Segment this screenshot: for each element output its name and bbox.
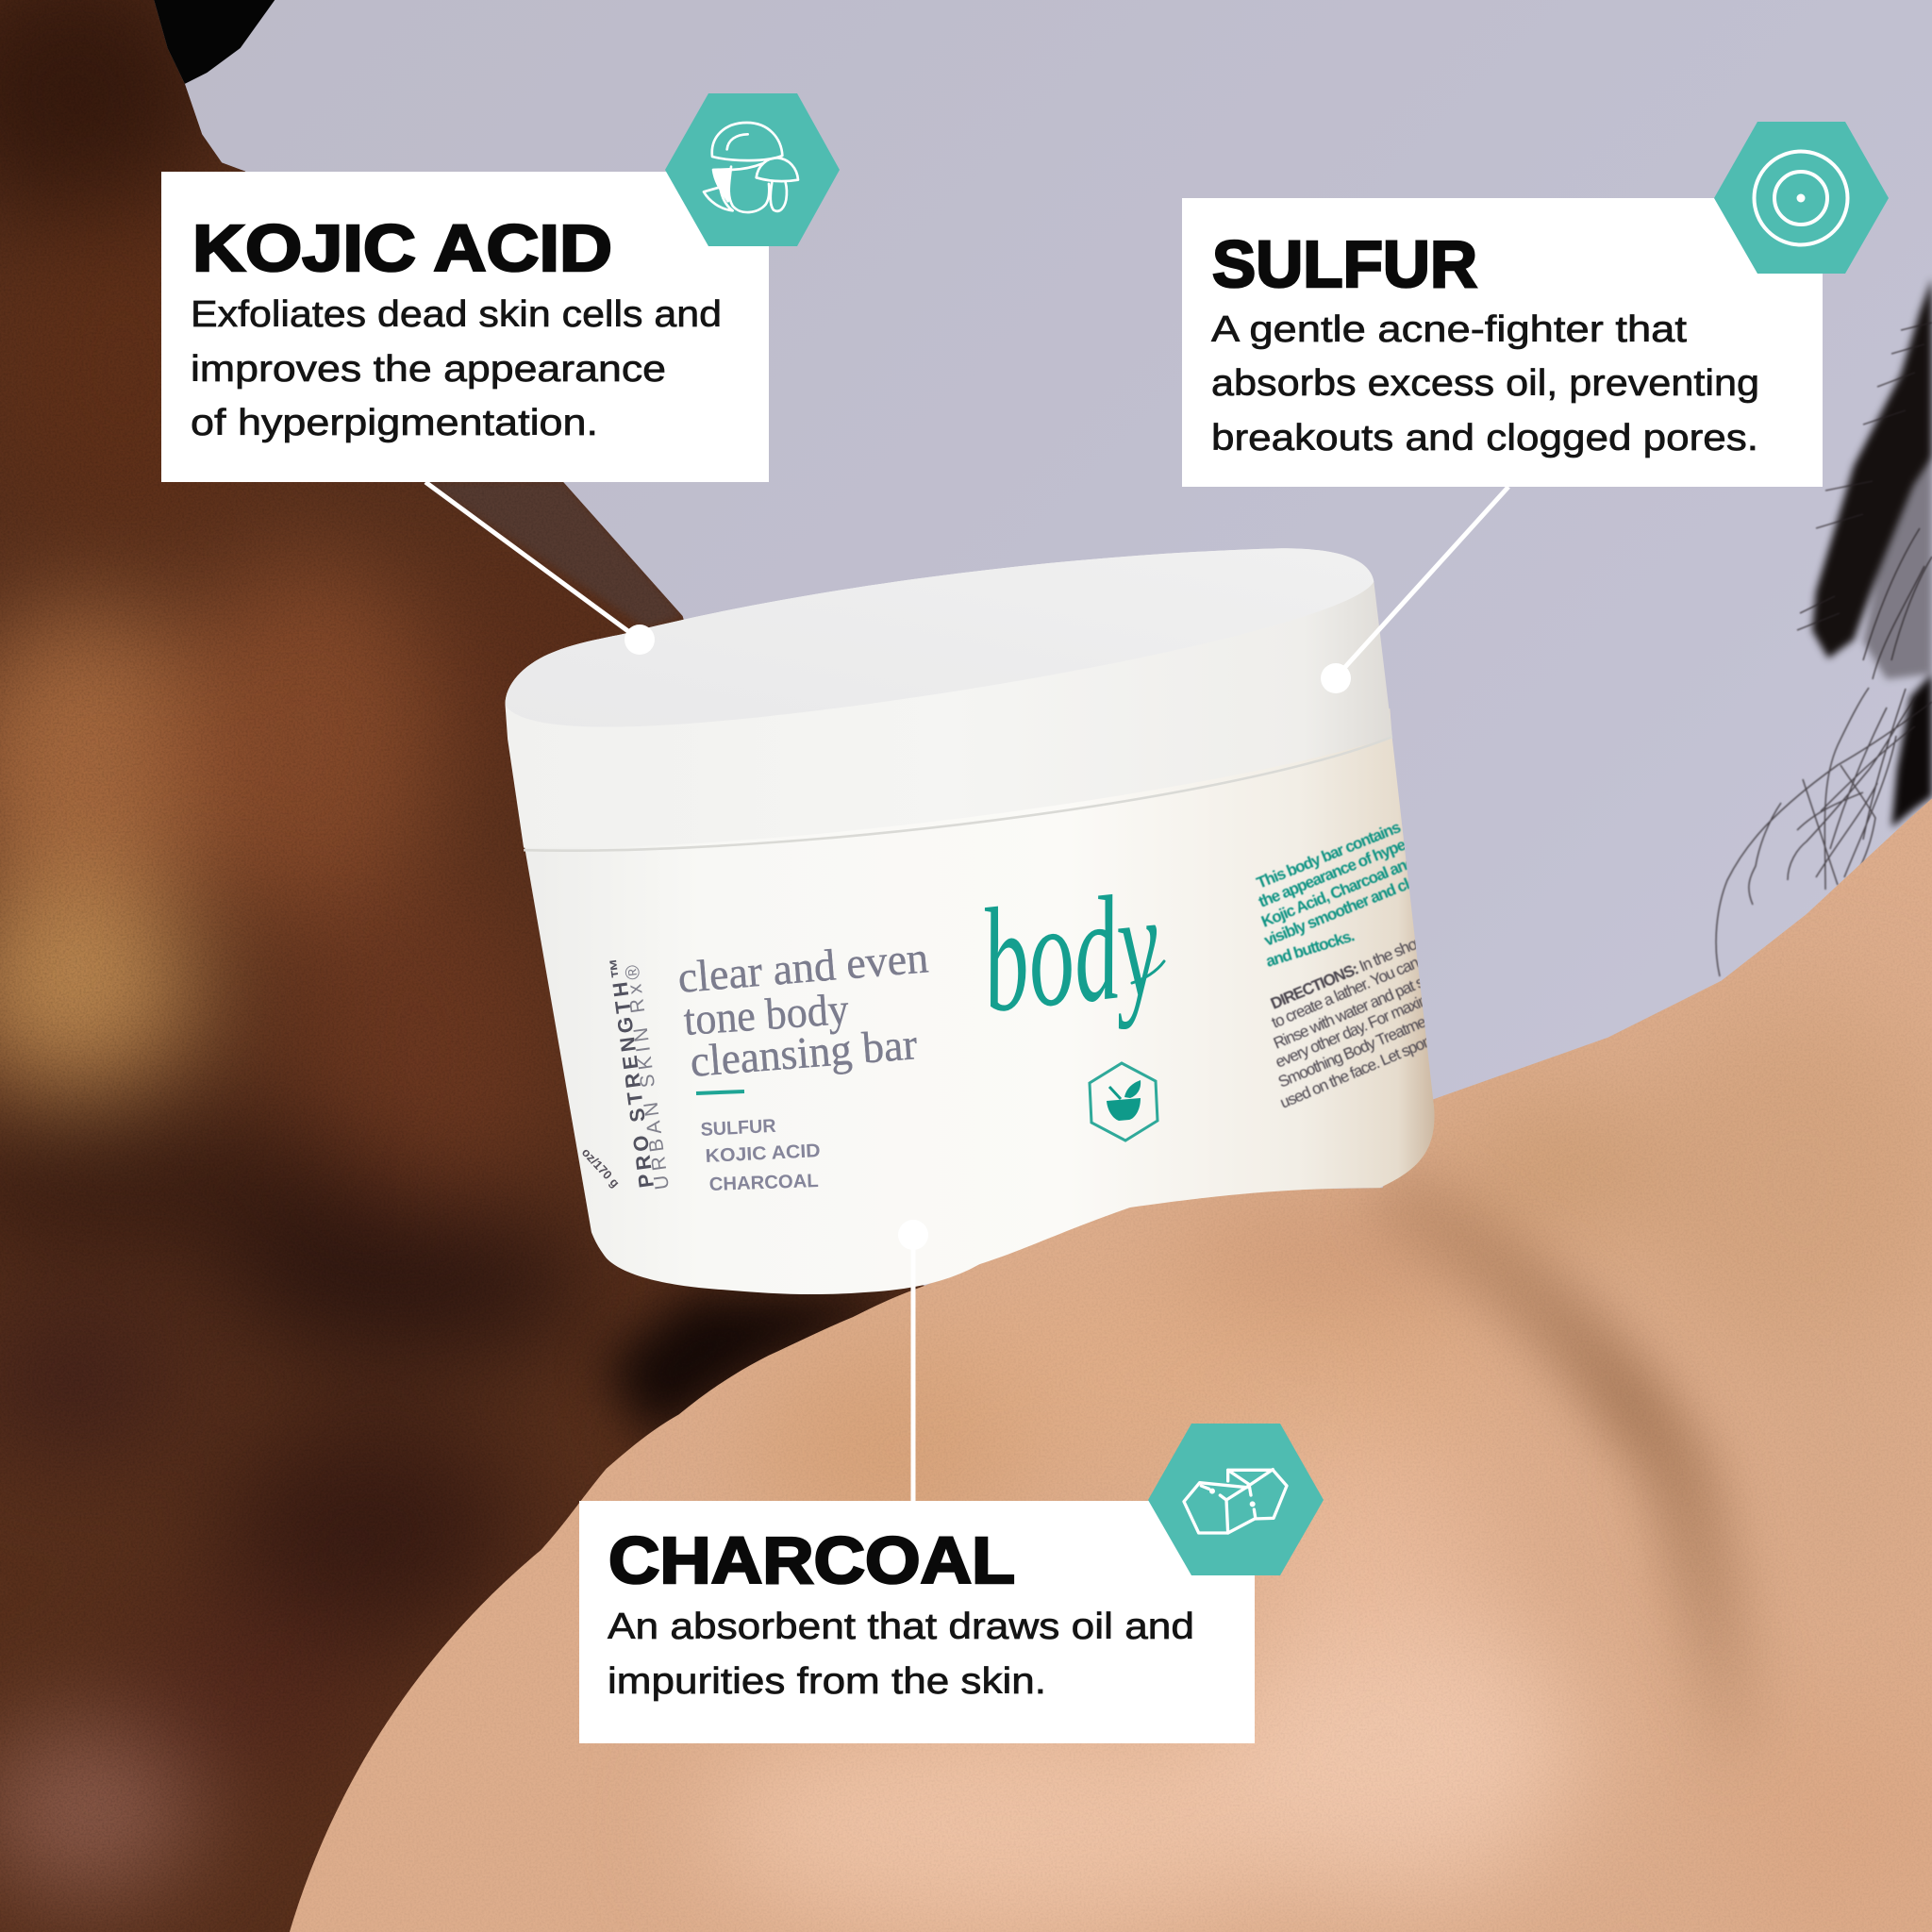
card — [1182, 198, 1823, 487]
description: of hyperpigmentation. — [191, 403, 598, 443]
product jar — [506, 548, 1434, 1294]
garment strap — [425, 482, 683, 628]
photo: dark skin shoulder and neck — [0, 0, 1010, 1932]
card — [161, 172, 769, 482]
deep shadow below jar — [604, 1293, 924, 1441]
description: breakouts and clogged pores. — [1211, 418, 1758, 458]
panel: charcoal — [579, 1424, 1324, 1743]
photo: hair right — [1716, 278, 1932, 976]
skin grain — [292, 811, 1932, 1932]
body script flourish — [1132, 961, 1164, 983]
description: An absorbent that draws oil and — [608, 1607, 1194, 1647]
jar front label — [579, 861, 1167, 1195]
connector: kojic acid — [425, 482, 655, 655]
jar side label: This body bar contains a proprietary blend — [1254, 770, 1523, 892]
jar front label: CHARCOAL — [708, 1171, 819, 1195]
jar lid — [506, 548, 1392, 848]
description — [608, 1607, 1194, 1702]
jar side label: Kojic Acid, Charcoal and Salicylic Acid for — [1258, 810, 1524, 931]
panel: kojic acid — [161, 93, 840, 482]
panel: sulfur — [1182, 122, 1889, 487]
jar side label: used on the face. Let sponge air dry — [1277, 1009, 1487, 1112]
jar front label: URBAN SKIN Rx® — [622, 963, 674, 1191]
ingredient list: SULFUR — [700, 1116, 777, 1141]
description: Exfoliates dead skin cells and — [191, 294, 722, 335]
skin grain — [0, 23, 893, 1932]
icon: charcoal chunks — [1148, 1424, 1324, 1575]
jar side label: and buttocks. — [1264, 926, 1357, 971]
connector: sulfur — [1321, 487, 1508, 693]
jar side label: every other day. For maximum results use — [1273, 955, 1517, 1072]
card — [579, 1501, 1255, 1743]
photo: hair top left — [154, 0, 275, 84]
description: A gentle acne-fighter that — [1211, 309, 1687, 350]
brand vertical: PRO STRENGTH™ — [605, 956, 658, 1190]
heading: KOJIC ACID — [192, 211, 612, 285]
body script: body — [974, 861, 1167, 1044]
jar lid top face — [506, 548, 1374, 727]
description: absorbs excess oil, preventing — [1211, 363, 1759, 404]
connector: charcoal — [898, 1220, 928, 1501]
jar side label: visibly smoother and clearer skin on the back — [1261, 820, 1549, 950]
jar body — [519, 708, 1435, 1294]
description — [1211, 309, 1759, 458]
lid groove — [524, 737, 1392, 851]
icon: concentric circles — [1714, 122, 1889, 274]
icon: mushrooms — [665, 93, 840, 246]
description: improves the appearance — [191, 349, 666, 390]
jar side label: to create a lather. You can allow the lather — [1269, 916, 1509, 1032]
heading: CHARCOAL — [608, 1524, 1015, 1597]
jar side label — [1255, 824, 1427, 1108]
jar side label: the appearance of hyperpigmentation with — [1256, 789, 1524, 911]
jar side label: DIRECTIONS: In the shower, wet the bar — [1268, 897, 1509, 1013]
jar side label: Smoothing Body Treatment or Clear — [1275, 988, 1488, 1091]
teal rule — [696, 1091, 744, 1093]
jar front label: KOJIC ACID — [705, 1141, 821, 1167]
icon: mortar hexagon — [1090, 1063, 1158, 1141]
description — [191, 294, 722, 443]
heading: SULFUR — [1212, 227, 1477, 301]
product name: clear and even — [676, 933, 930, 1003]
description: impurities from the skin. — [608, 1661, 1046, 1702]
photo: light skin shoulder — [290, 798, 1932, 1932]
jar side label: Rinse with water and pat skin dry. Use — [1271, 945, 1492, 1053]
net weight: oz/170 g — [579, 1145, 623, 1191]
jar front label: cleansing bar — [689, 1020, 919, 1087]
shoulder crease — [1380, 1189, 1750, 1787]
jar front label: tone body — [682, 985, 851, 1045]
